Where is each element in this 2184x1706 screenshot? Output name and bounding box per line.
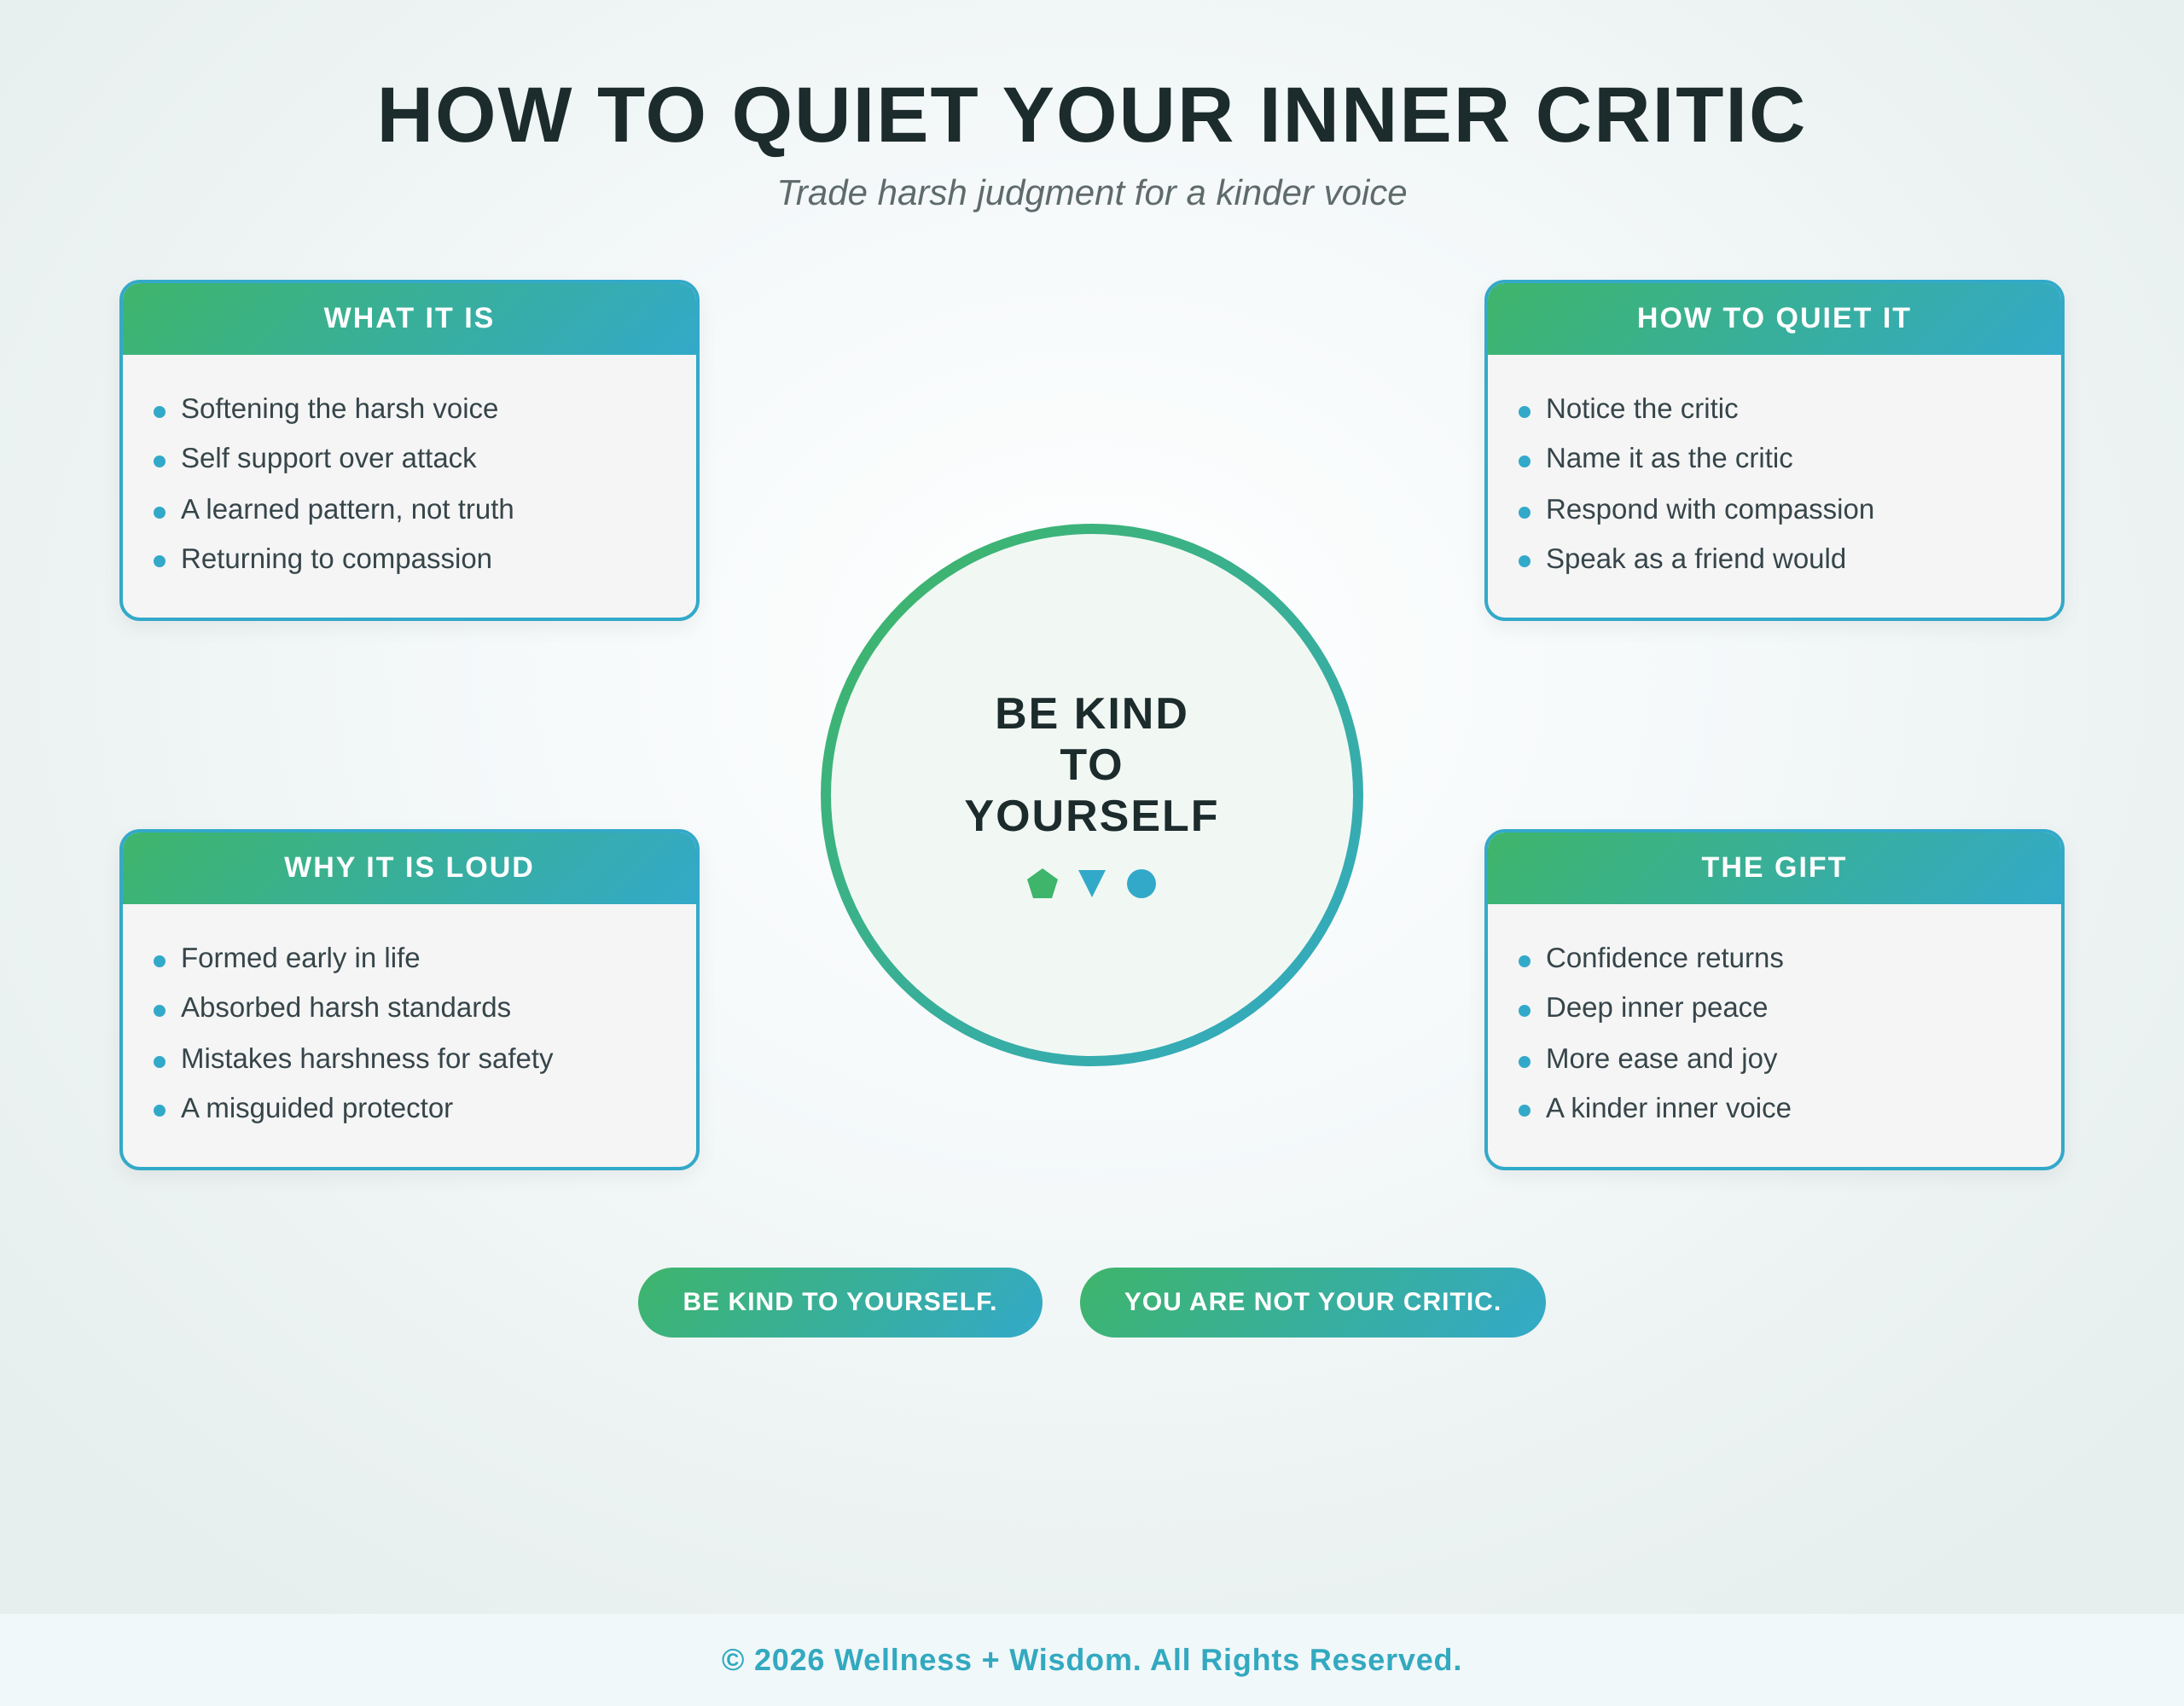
list: the gift: Confidence returns bbox=[1546, 942, 1784, 973]
pill: you are not your critic bbox=[1080, 1268, 1546, 1338]
list: what it is: A learned pattern, not truth bbox=[181, 493, 514, 525]
list: how to quiet it: Name it as the critic bbox=[1546, 442, 1793, 473]
list: what it is: Returning to compassion bbox=[181, 543, 492, 574]
circle fill bbox=[831, 534, 1353, 1056]
list: the gift: Deep inner peace bbox=[1546, 991, 1769, 1023]
panel: what it is bbox=[119, 280, 700, 621]
center message: TO bbox=[1060, 740, 1124, 790]
list: why it is loud bbox=[154, 942, 554, 1123]
heading: what it is bbox=[123, 283, 696, 355]
pill: be kind to yourself bbox=[638, 1268, 1043, 1338]
list: the gift: More ease and joy bbox=[1546, 1042, 1778, 1074]
heading: the gift bbox=[1488, 833, 2061, 904]
center circle bbox=[821, 524, 1363, 1066]
panel: the gift bbox=[1484, 829, 2065, 1170]
footer: © 2026 Wellness + Wisdom. All Rights Reserved. bbox=[722, 1642, 1462, 1677]
heading: the gift: THE GIFT bbox=[1702, 851, 1847, 884]
panel: why it is loud bbox=[119, 829, 700, 1170]
list: why it is loud: Formed early in life bbox=[181, 942, 421, 973]
center message bbox=[964, 689, 1220, 841]
heading: what it is: WHAT IT IS bbox=[324, 302, 495, 334]
list: the gift bbox=[1519, 942, 1792, 1123]
footer bbox=[0, 1614, 2184, 1706]
center message: YOURSELF bbox=[964, 792, 1220, 841]
pill: you are not your critic: YOU ARE NOT YOUR CRITIC. bbox=[1124, 1288, 1502, 1316]
list: what it is: Softening the harsh voice bbox=[181, 392, 498, 424]
list: why it is loud: Mistakes harshness for safety bbox=[181, 1042, 554, 1074]
heading: how to quiet it: HOW TO QUIET IT bbox=[1637, 302, 1912, 334]
list: the gift: A kinder inner voice bbox=[1546, 1092, 1792, 1123]
icon: circle bbox=[1127, 869, 1156, 898]
list: how to quiet it: Speak as a friend would bbox=[1546, 543, 1846, 574]
heading: why it is loud bbox=[123, 833, 696, 904]
subtitle: Trade harsh judgment for a kinder voice bbox=[776, 172, 1408, 212]
list: why it is loud: Absorbed harsh standards bbox=[181, 991, 511, 1023]
heading: how to quiet it bbox=[1488, 283, 2061, 355]
icon: triangle bbox=[1078, 870, 1106, 897]
list: what it is: Self support over attack bbox=[181, 442, 477, 473]
list: what it is bbox=[154, 392, 514, 574]
list: how to quiet it bbox=[1519, 392, 1874, 574]
pill: be kind to yourself: BE KIND TO YOURSELF. bbox=[683, 1288, 997, 1316]
list: how to quiet it: Notice the critic bbox=[1546, 392, 1739, 424]
icon: pentagon bbox=[1027, 868, 1058, 898]
list: how to quiet it: Respond with compassion bbox=[1546, 493, 1874, 525]
list: why it is loud: A misguided protector bbox=[181, 1092, 453, 1123]
panel: how to quiet it bbox=[1484, 280, 2065, 621]
title: HOW TO QUIET YOUR INNER CRITIC bbox=[377, 72, 1807, 159]
heading: why it is loud: WHY IT IS LOUD bbox=[284, 851, 535, 884]
center message: BE KIND bbox=[995, 689, 1189, 739]
